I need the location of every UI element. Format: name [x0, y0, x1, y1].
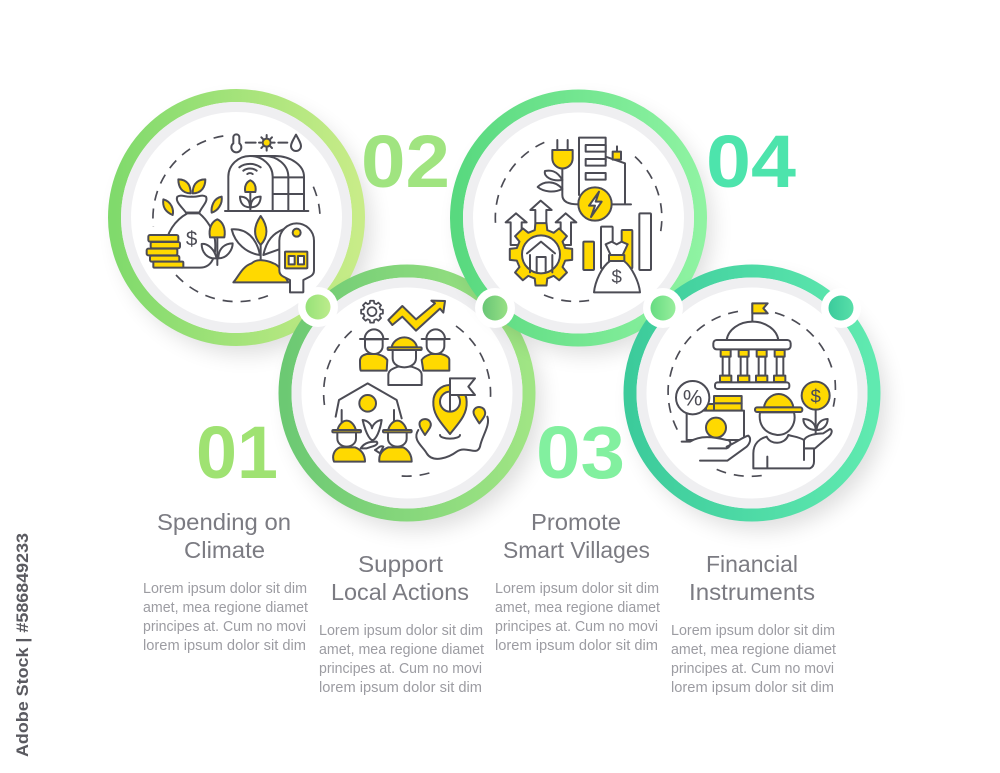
text block: column 3: amet, mea regione diamet: [495, 600, 660, 616]
heading: financial instruments: Financial: [706, 551, 798, 577]
heading: spending on climate: Climate: [184, 537, 265, 563]
text block: column 1: Lorem ipsum dolor sit dim: [143, 581, 307, 597]
heading: support local actions: [331, 551, 469, 605]
icon: climate spending: [147, 134, 320, 302]
text block: column 4: amet, mea regione diamet: [671, 642, 836, 658]
text block: column 4: lorem ipsum dolor sit dim: [671, 680, 834, 696]
text block: column 2: [319, 623, 484, 696]
number 01: 01: [196, 411, 278, 494]
icon: financial instruments: [668, 303, 835, 476]
text block: column 1: [143, 581, 308, 654]
text block: column 4: principes at. Cum no movi: [671, 661, 834, 677]
panel: circle 03: [456, 96, 712, 354]
panel: circle 01: [114, 96, 371, 354]
connector dot 1: [298, 287, 338, 327]
heading: financial instruments: [689, 551, 815, 605]
number 02: 02: [361, 120, 450, 203]
icon: financial instruments: $: [810, 386, 821, 407]
vertical stock id label: Adobe Stock | #586849233: [13, 533, 32, 757]
icon: climate spending: $: [186, 227, 198, 250]
text block: column 1: principes at. Cum no movi: [143, 619, 306, 635]
text block: column 2: lorem ipsum dolor sit dim: [319, 680, 482, 696]
text block: column 3: [495, 581, 660, 654]
text block: column 3: principes at. Cum no movi: [495, 619, 658, 635]
heading: support local actions: Local Actions: [331, 579, 469, 605]
icon: financial instruments: %: [683, 386, 702, 411]
heading: financial instruments: Instruments: [689, 579, 815, 605]
icon: local actions: [324, 301, 491, 476]
connector dot 3: [643, 288, 683, 328]
heading: support local actions: Support: [358, 551, 444, 577]
text block: column 1: amet, mea regione diamet: [143, 600, 308, 616]
number 03: 03: [536, 411, 625, 494]
heading: promote smart villages: [503, 509, 650, 563]
text block: column 1: lorem ipsum dolor sit dim: [143, 638, 306, 654]
panel: circle 02: [285, 271, 541, 530]
text block: column 4: [671, 623, 836, 696]
text block: column 2: Lorem ipsum dolor sit dim: [319, 623, 483, 639]
text block: column 3: Lorem ipsum dolor sit dim: [495, 581, 659, 597]
text block: column 2: principes at. Cum no movi: [319, 661, 482, 677]
heading: spending on climate: [157, 509, 291, 563]
panel: circle 04: [630, 271, 886, 530]
text block: column 2: amet, mea regione diamet: [319, 642, 484, 658]
icon: smart villages: $: [611, 266, 622, 287]
text block: column 3: lorem ipsum dolor sit dim: [495, 638, 658, 654]
number 04: 04: [706, 120, 796, 203]
heading: promote smart villages: Smart Villages: [503, 537, 650, 563]
icon: smart villages: [495, 138, 662, 301]
heading: promote smart villages: Promote: [531, 509, 621, 535]
connector dot 2: [475, 288, 515, 328]
connector dot 4: [821, 288, 861, 328]
text block: column 4: Lorem ipsum dolor sit dim: [671, 623, 835, 639]
heading: spending on climate: Spending on: [157, 509, 291, 535]
